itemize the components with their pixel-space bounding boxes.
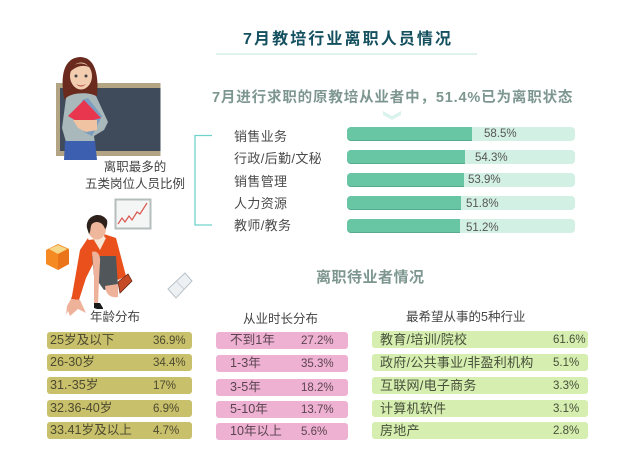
row — [372, 354, 588, 371]
row — [372, 400, 588, 417]
row — [47, 422, 192, 439]
row — [47, 377, 192, 394]
row — [372, 422, 588, 439]
row: 26-30岁 — [50, 355, 95, 369]
row: 25岁及以下 — [50, 333, 114, 347]
table: tenure distribution — [216, 332, 348, 440]
row: 13.7% — [301, 404, 334, 416]
row: 政府/公共事业/非盈利机构 — [380, 355, 533, 370]
row: 5.6% — [301, 426, 327, 438]
row: 35.3% — [301, 358, 334, 370]
row — [216, 423, 348, 440]
row: 32.36-40岁 — [50, 401, 112, 415]
row: 3.1% — [553, 403, 579, 415]
row — [47, 354, 192, 371]
bar 51.8% — [347, 196, 575, 210]
row — [47, 400, 192, 417]
illustration: teacher at blackboard — [56, 57, 160, 160]
job labels — [234, 129, 322, 233]
row — [216, 355, 348, 372]
row: 不到1年 — [230, 333, 275, 347]
label: 行政/后勤/文秘 — [234, 151, 322, 166]
label: 销售管理 — [234, 174, 287, 189]
label: 人力资源 — [234, 196, 287, 211]
subtitle: 7月进行求职的原教培从业者中，51.4%已为离职状态 — [212, 90, 573, 106]
bar 51.2% — [347, 219, 575, 233]
row — [216, 401, 348, 418]
bar 51.8%: 51.8% — [466, 198, 499, 210]
row: 17% — [153, 380, 176, 392]
table: desired industries — [372, 331, 588, 439]
row — [216, 379, 348, 396]
icon: line chart board — [116, 200, 150, 228]
row: 5-10年 — [230, 402, 268, 416]
label: 教师/教务 — [234, 218, 291, 233]
icon: open book — [168, 273, 192, 298]
bar 53.9%: 53.9% — [468, 174, 501, 186]
row: 33.41岁及以上 — [50, 423, 132, 437]
row: 6.9% — [153, 403, 179, 415]
row: 3.3% — [553, 380, 579, 392]
row: 31.-35岁 — [50, 378, 98, 392]
row: 2.8% — [553, 425, 579, 437]
row: 61.6% — [553, 334, 586, 346]
bar 58.5% — [347, 127, 575, 141]
row: 36.9% — [153, 335, 186, 347]
heading: industries: 最希望从事的5种行业 — [406, 310, 525, 324]
row — [216, 332, 348, 349]
icon: orange cube — [46, 244, 69, 270]
bar 53.9% — [347, 173, 575, 187]
bracket — [195, 136, 212, 225]
illustration: businesswoman in starting stance — [66, 215, 132, 316]
row: 1-3年 — [230, 356, 261, 370]
bar 58.5%: 58.5% — [484, 128, 517, 140]
left caption: 五类岗位人员比例 — [85, 177, 185, 191]
row: 房地产 — [380, 423, 420, 438]
row: 18.2% — [301, 382, 334, 394]
heading: tenure: 从业时长分布 — [243, 312, 318, 326]
row: 27.2% — [301, 335, 334, 347]
row: 3-5年 — [230, 380, 261, 394]
row: 计算机软件 — [380, 401, 446, 416]
row — [372, 377, 588, 394]
bar 51.2%: 51.2% — [466, 222, 499, 234]
title: 7月教培行业离职人员情况 — [243, 31, 453, 48]
left caption — [85, 160, 185, 191]
row — [47, 332, 192, 349]
row: 教育/培训/院校 — [380, 332, 467, 347]
bar 54.3% — [347, 150, 575, 164]
row — [372, 331, 588, 348]
row: 5.1% — [553, 357, 579, 369]
table: age distribution — [47, 332, 192, 439]
label: 销售业务 — [234, 129, 287, 144]
row: 互联网/电子商务 — [380, 378, 477, 393]
heading: age: 年龄分布 — [90, 310, 140, 324]
bar chart: job types — [347, 127, 575, 234]
row: 4.7% — [153, 425, 179, 437]
section heading: 离职待业者情况 — [316, 269, 425, 286]
row: 10年以上 — [230, 424, 282, 438]
row: 34.4% — [153, 357, 186, 369]
bar 54.3%: 54.3% — [475, 152, 508, 164]
left caption: 离职最多的 — [104, 160, 166, 174]
